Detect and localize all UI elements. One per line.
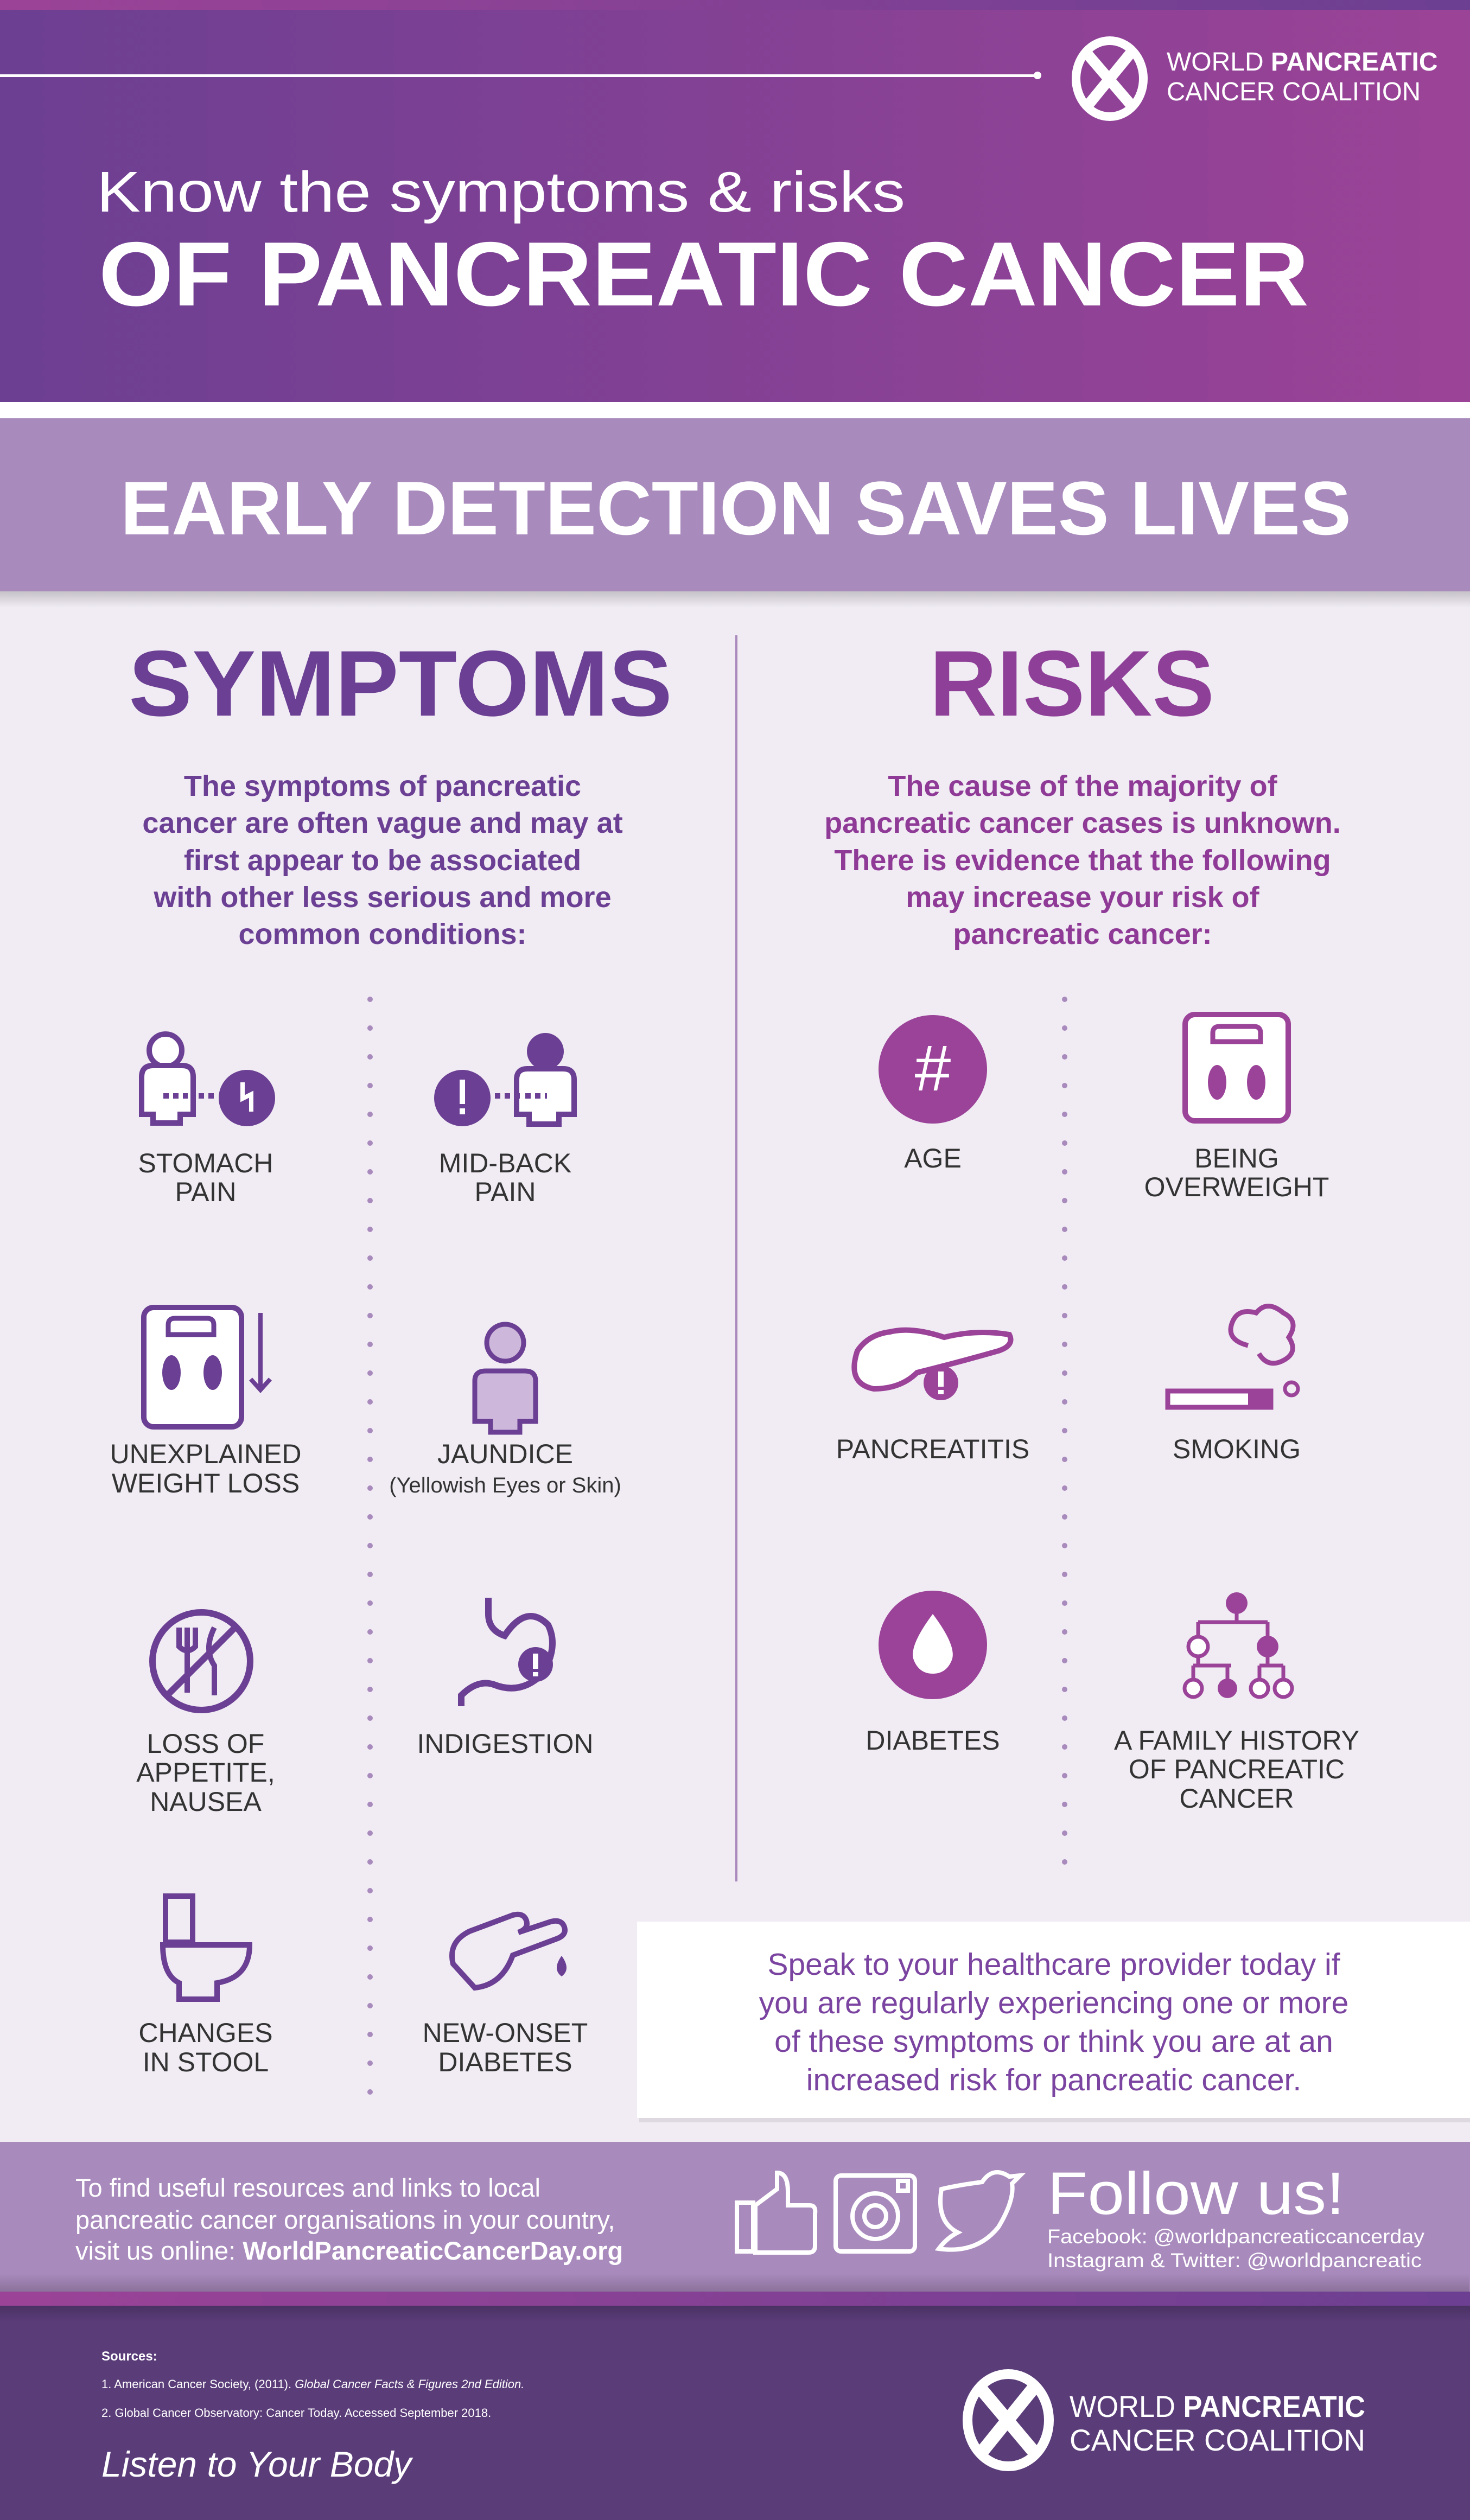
logo top xyxy=(1076,41,1438,117)
risk: diabetes: DIABETES xyxy=(866,1725,1000,1756)
risk: family history: OF PANCREATIC xyxy=(1129,1754,1345,1784)
risk: age xyxy=(879,1015,987,1173)
tagline: Listen to Your Body xyxy=(101,2444,413,2484)
symptom: loss of appetite: APPETITE, xyxy=(136,1757,275,1788)
symptoms intro: with other less serious and more xyxy=(153,881,612,914)
symptom: jaundice: JAUNDICE xyxy=(437,1439,573,1469)
icon: twitter xyxy=(939,2172,1020,2250)
risk: family history: CANCER xyxy=(1179,1783,1294,1814)
symptom: unexplained weight loss xyxy=(110,1307,301,1498)
risk: family history: A FAMILY HISTORY xyxy=(1114,1725,1359,1756)
symptom: stomach pain: STOMACH xyxy=(138,1148,273,1178)
banner: EARLY DETECTION SAVES LIVES xyxy=(120,465,1351,551)
symptoms intro xyxy=(142,770,623,950)
divider xyxy=(735,635,737,1881)
symptom: loss of appetite xyxy=(136,1612,275,1817)
symptom: indigestion xyxy=(417,1598,594,1759)
risk: pancreatitis xyxy=(836,1330,1029,1464)
title: Know the symptoms & risks xyxy=(97,160,905,224)
title: OF PANCREATIC CANCER xyxy=(99,223,1309,325)
symptom: loss of appetite: LOSS OF xyxy=(147,1728,264,1759)
symptoms intro: common conditions: xyxy=(239,918,526,950)
symptoms intro: first appear to be associated xyxy=(184,844,581,877)
follow us: Facebook: @worldpancreaticcancerday xyxy=(1047,2225,1425,2248)
logo bottom: WORLD PANCREATIC xyxy=(1070,2389,1365,2423)
callout xyxy=(637,1922,1470,2122)
follow us: Instagram & Twitter: @worldpancreatic xyxy=(1047,2249,1422,2272)
risk: pancreatitis: PANCREATITIS xyxy=(836,1434,1029,1464)
symptom: jaundice: (Yellowish Eyes or Skin) xyxy=(389,1473,621,1497)
risk: overweight: BEING xyxy=(1194,1143,1279,1173)
symptoms intro: cancer are often vague and may at xyxy=(142,807,623,839)
risk: age: AGE xyxy=(904,1143,962,1173)
symptom: new-onset diabetes: NEW-ONSET xyxy=(423,2018,588,2048)
callout: of these symptoms or think you are at an xyxy=(774,2024,1333,2059)
callout: you are regularly experiencing one or more xyxy=(759,1986,1348,2020)
stripe xyxy=(0,2292,1470,2306)
sources: 1. American Cancer Society, (2011). Global Cancer Facts & Figures 2nd Edition. xyxy=(101,2377,524,2391)
symptom: stomach pain: PAIN xyxy=(175,1177,237,1207)
risk: smoking xyxy=(1168,1306,1301,1464)
bottom footer xyxy=(0,2306,1470,2520)
callout: Speak to your healthcare provider today if xyxy=(767,1947,1340,1982)
resources text xyxy=(75,2173,623,2265)
dotted lines xyxy=(367,999,373,2107)
follow us: Follow us! xyxy=(1047,2160,1345,2227)
risks intro: may increase your risk of xyxy=(906,881,1260,914)
symptom: loss of appetite: NAUSEA xyxy=(150,1787,262,1817)
symptom: jaundice xyxy=(389,1324,621,1497)
footer band xyxy=(0,2142,1470,2292)
symptom: stomach pain xyxy=(138,1034,275,1207)
follow us xyxy=(1047,2160,1425,2272)
symptom: unexplained weight loss: UNEXPLAINED xyxy=(110,1439,301,1469)
icon: instagram xyxy=(836,2176,915,2251)
risk: diabetes xyxy=(866,1591,1000,1756)
symptom: mid-back pain: MID-BACK xyxy=(439,1148,571,1178)
symptoms heading: SYMPTOMS xyxy=(129,631,672,736)
risk: overweight: OVERWEIGHT xyxy=(1144,1172,1329,1202)
banner xyxy=(0,402,1470,608)
sources xyxy=(101,2349,524,2420)
symptom: unexplained weight loss: WEIGHT LOSS xyxy=(112,1468,300,1498)
logo top: CANCER COALITION xyxy=(1167,78,1421,106)
risks intro: pancreatic cancer: xyxy=(953,918,1212,950)
logo bottom: CANCER COALITION xyxy=(1070,2423,1365,2457)
resources text: To find useful resources and links to local xyxy=(75,2173,540,2202)
symptom: indigestion: INDIGESTION xyxy=(417,1728,594,1759)
callout: increased risk for pancreatic cancer. xyxy=(806,2063,1301,2097)
sources: Sources: xyxy=(101,2349,157,2364)
resources text: visit us online: WorldPancreaticCancerDay.org xyxy=(75,2236,623,2265)
risk: overweight xyxy=(1144,1015,1329,1202)
symptom: mid-back pain: PAIN xyxy=(474,1177,536,1207)
risks intro: The cause of the majority of xyxy=(888,770,1278,802)
risks intro: There is evidence that the following xyxy=(834,844,1331,877)
logo bottom xyxy=(968,2374,1365,2466)
symptom: new-onset diabetes: DIABETES xyxy=(438,2047,572,2077)
risks heading: RISKS xyxy=(930,631,1214,736)
symptom: changes in stool: IN STOOL xyxy=(143,2047,269,2077)
sources: 2. Global Cancer Observatory: Cancer Today. Accessed September 2018. xyxy=(101,2406,491,2420)
resources text: pancreatic cancer organisations in your country, xyxy=(75,2205,615,2234)
icon: thumbs up xyxy=(737,2173,815,2253)
symptoms intro: The symptoms of pancreatic xyxy=(184,770,581,802)
header xyxy=(0,0,1470,402)
symptom: changes in stool xyxy=(138,1896,273,2077)
risk: family history xyxy=(1114,1592,1359,1814)
symptom: mid-back pain xyxy=(434,1033,574,1207)
risk: age: # xyxy=(915,1032,951,1105)
title xyxy=(97,160,1309,325)
symptom: new-onset diabetes xyxy=(423,1915,588,2077)
symptom: changes in stool: CHANGES xyxy=(138,2018,273,2048)
risks intro: pancreatic cancer cases is unknown. xyxy=(824,807,1341,839)
risks intro xyxy=(824,770,1341,950)
risk: smoking: SMOKING xyxy=(1173,1434,1301,1464)
logo top: WORLD PANCREATIC xyxy=(1167,48,1438,76)
